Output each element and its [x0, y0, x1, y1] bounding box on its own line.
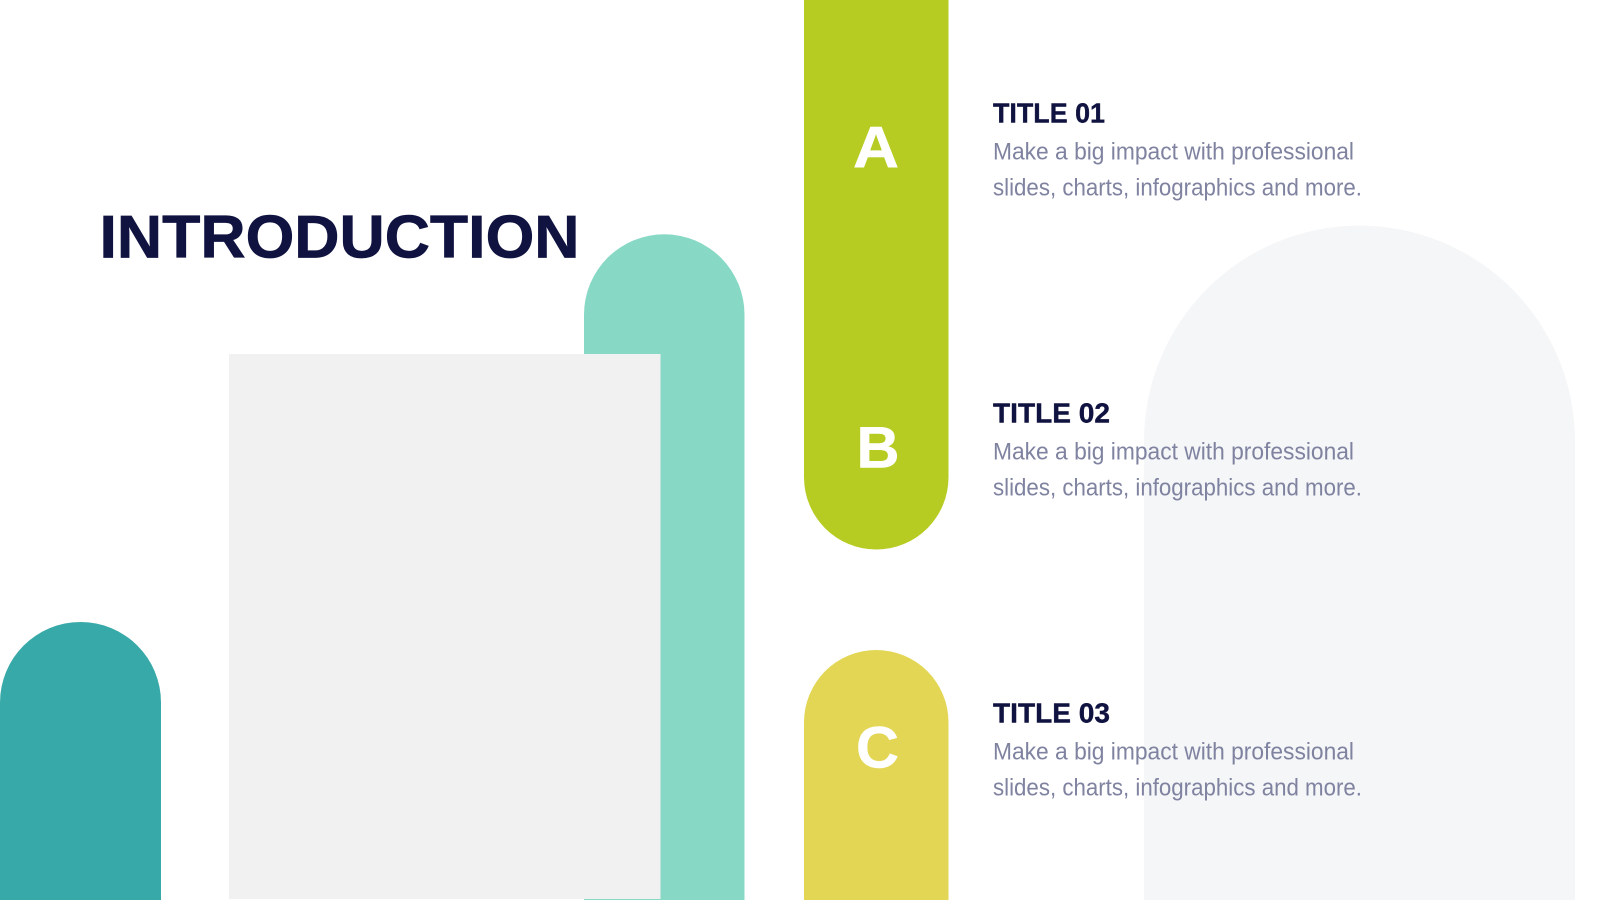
item 01 body: [993, 138, 1362, 202]
item 03 heading: TITLE 03: [993, 698, 1110, 728]
item 02 heading: TITLE 02: [993, 398, 1110, 428]
item 03: [993, 698, 1362, 802]
item 03 body: [993, 738, 1362, 802]
image placeholder block: [229, 354, 660, 899]
arch: mint behind image block: [584, 234, 744, 900]
item 01 heading: TITLE 01: [993, 98, 1105, 128]
item 02: [993, 398, 1362, 502]
item 03 body: Make a big impact with professional: [993, 738, 1354, 766]
title: INTRODUCTION: [100, 202, 580, 270]
background arch: pale grey: [1144, 226, 1575, 900]
item 01 body: slides, charts, infographics and more.: [993, 174, 1362, 202]
letter A: A: [853, 116, 899, 180]
item 02 body: [993, 438, 1362, 502]
item 01: [993, 98, 1362, 202]
arch: teal bottom left: [0, 622, 161, 900]
item 02 body: Make a big impact with professional: [993, 438, 1354, 466]
item 03 body: slides, charts, infographics and more.: [993, 774, 1362, 802]
arch: yellow tab for C: [804, 650, 948, 900]
item 01 body: Make a big impact with professional: [993, 138, 1354, 166]
letter C: C: [856, 716, 899, 780]
letter B: B: [856, 416, 900, 480]
item 02 body: slides, charts, infographics and more.: [993, 474, 1362, 502]
pill: lime tab for A and B: [804, 0, 948, 550]
